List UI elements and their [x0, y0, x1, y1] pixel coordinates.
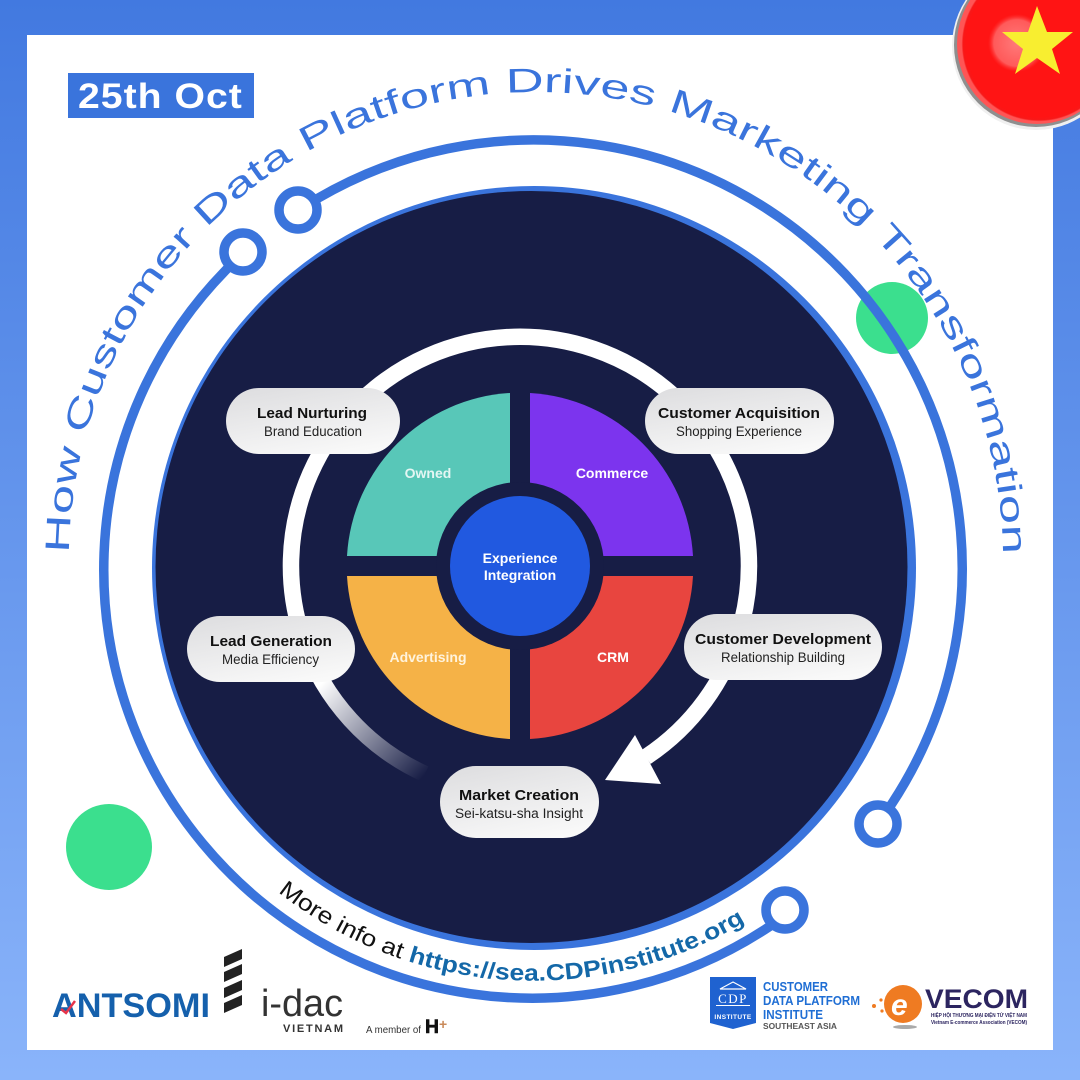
label: Experience Integration: Experience: [483, 550, 558, 566]
pill: Market Creation: Market Creation: [459, 787, 579, 804]
logo: CDP Institute: INSTITUTE: [714, 1014, 752, 1021]
arrowhead: [605, 735, 661, 784]
label: Owned: Owned: [405, 465, 451, 481]
segment: Commerce: [530, 393, 693, 556]
logo: CDP Institute: [710, 977, 860, 1031]
pill: Lead Generation: [187, 616, 355, 682]
segment: Advertising: [347, 576, 510, 739]
quadrant chart: [347, 393, 693, 739]
label: Commerce: Commerce: [576, 465, 648, 481]
logo: CDP Institute: DATA PLATFORM: [763, 993, 860, 1008]
logo: CDP Institute: CUSTOMER: [763, 979, 829, 994]
label: Advertising: Advertising: [389, 649, 467, 665]
pill: Lead Nurturing: Lead Nurturing: [257, 405, 367, 422]
quadrant chart: Integration: [484, 567, 556, 583]
logo: VECOM: Vietnam E-commerce Association (VECOM): [931, 1020, 1027, 1026]
label: CRM: CRM: [597, 649, 629, 665]
logo: Antsomi: ANTSOMI: [52, 987, 210, 1025]
logo: CDP Institute: CDP: [718, 991, 748, 1006]
logo: VECOM: e: [891, 989, 908, 1022]
pill: Customer Development: Customer Development: [695, 631, 871, 648]
logo: i-dac Vietnam: VIETNAM: [283, 1023, 343, 1035]
logo: member of H+: [366, 1016, 447, 1038]
white cycle arc: [291, 337, 749, 774]
pill: Customer Development: Relationship Building: [721, 650, 845, 665]
logo: member of H+: A member of: [366, 1025, 421, 1036]
logo: member of H+: H: [425, 1017, 439, 1038]
pill: Lead Nurturing: [226, 388, 400, 454]
segment: Owned: [347, 393, 510, 556]
green dot left: [66, 804, 152, 890]
pill: Market Creation: Sei-katsu-sha Insight: [455, 806, 583, 821]
outer ring with nodes: [104, 140, 962, 998]
pill: Customer Acquisition: Customer Acquisition: [658, 405, 820, 422]
logo: VECOM: VECOM: [925, 984, 1028, 1014]
icon: Vietnam flag badge: [952, 0, 1080, 130]
center circle: [450, 496, 590, 636]
curved title: How Customer Data Platform Drives Marketing Transformation: [46, 68, 1023, 551]
pill: Lead Generation: Media Efficiency: [222, 652, 319, 667]
logo: i-dac Vietnam: i-dac: [261, 983, 343, 1025]
pill: Customer Acquisition: Shopping Experience: [676, 424, 802, 439]
curved more info text: More info at https://sea.CDPinstitute.org: [280, 880, 744, 981]
pill: Lead Nurturing: Brand Education: [264, 424, 362, 439]
pill: Market Creation: [440, 766, 599, 838]
pill: Customer Acquisition: [645, 388, 834, 454]
segment: CRM: [530, 576, 693, 739]
logo: VECOM: [872, 984, 1028, 1029]
logo: CDP Institute: INSTITUTE: [763, 1007, 823, 1022]
date badge: 25th Oct: [78, 76, 243, 116]
inner ring gap: [436, 482, 604, 650]
pill: Lead Generation: Lead Generation: [210, 633, 332, 650]
green dot right: [856, 282, 928, 354]
logo: CDP Institute: SOUTHEAST ASIA: [763, 1022, 837, 1031]
dark central disc: [152, 186, 916, 950]
logo: VECOM: HIỆP HỘI THƯƠNG MẠI ĐIỆN TỬ VIỆT NAM: [931, 1011, 1027, 1019]
logo: i-dac Vietnam stripes: [224, 949, 242, 1013]
pill: Customer Development: [684, 614, 882, 680]
logo: member of H+: +: [439, 1016, 447, 1032]
